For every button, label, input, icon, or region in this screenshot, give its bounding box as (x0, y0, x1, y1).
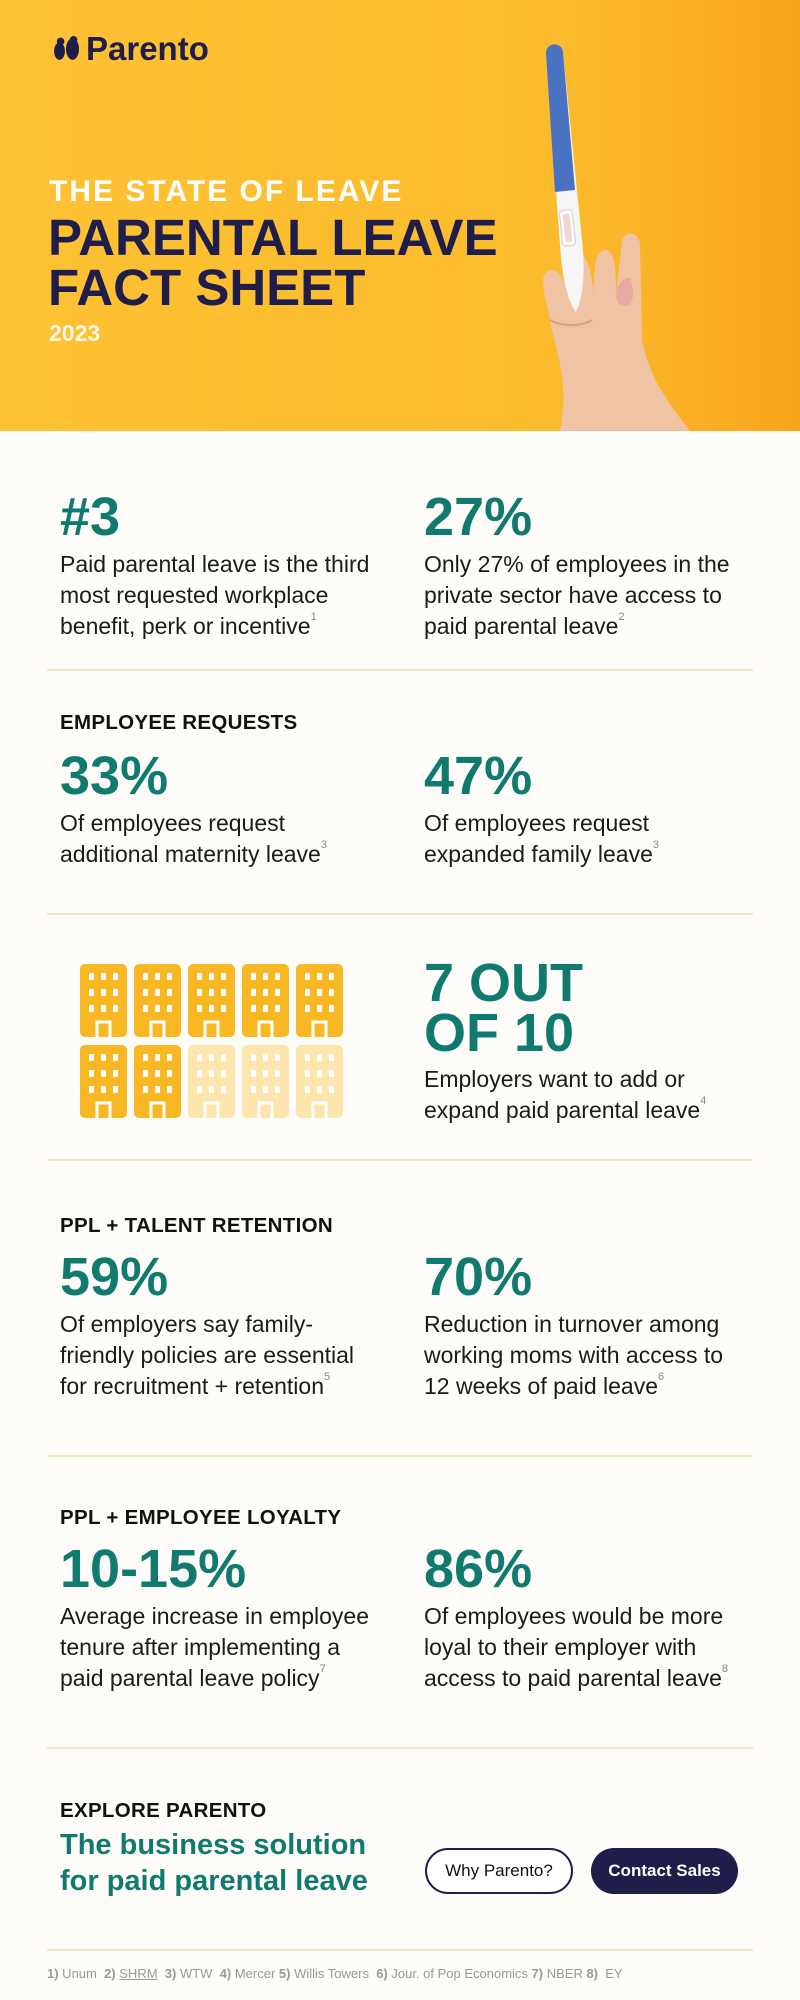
heading: PPL + talent retention: PPL + TALENT RETENTION (60, 1214, 333, 1237)
stat: 7 out of 10: 7 OUT (424, 953, 583, 1013)
stat: 86%: loyal to their employer with (424, 1634, 696, 1660)
title: PARENTAL LEAVE (48, 209, 498, 266)
stat: 59% (60, 1247, 354, 1399)
button: contact sales (591, 1848, 738, 1894)
button: contact sales: Contact Sales (608, 1861, 721, 1880)
title (48, 209, 498, 316)
stat: 59%: for recruitment + retention5 (60, 1371, 330, 1399)
stat: 10-15%: tenure after implementing a (60, 1634, 340, 1660)
stat: 47%: 47% (424, 746, 532, 806)
icon grid: 10 buildings, 7 highlighted (80, 964, 343, 1118)
stat: 33%: Of employees request (60, 810, 285, 836)
stat: 70%: working moms with access to (424, 1342, 723, 1368)
stat: 10-15%: 10-15% (60, 1539, 246, 1599)
stat: #3 (60, 487, 369, 639)
stat: 86%: access to paid parental leave8 (424, 1663, 728, 1691)
CTA: explore parento (60, 1799, 368, 1897)
stat: 33%: additional maternity leave3 (60, 839, 327, 867)
stat: 10-15%: paid parental leave policy7 (60, 1663, 326, 1691)
CTA: explore parento: for paid parental leave (60, 1865, 368, 1897)
stat: 7 out of 10: Employers want to add or (424, 1066, 685, 1092)
stat: 7 out of 10: OF 10 (424, 1003, 574, 1063)
title: FACT SHEET (48, 259, 365, 316)
stat: 33%: 33% (60, 746, 168, 806)
stat: 7 out of 10 (424, 953, 706, 1123)
stat: 59%: 59% (60, 1247, 168, 1307)
stat: 86% (424, 1539, 728, 1691)
stat: 47%: Of employees request (424, 810, 649, 836)
stat: 86%: Of employees would be more (424, 1603, 723, 1629)
stat: #3: Paid parental leave is the third (60, 551, 369, 577)
stat: 86%: 86% (424, 1539, 532, 1599)
stat: #3: most requested workplace (60, 582, 328, 608)
stat: 10-15% (60, 1539, 369, 1691)
CTA: explore parento: EXPLORE PARENTO (60, 1799, 266, 1822)
stat: 27%: paid parental leave2 (424, 611, 624, 639)
CTA: explore parento: The business solution (60, 1829, 366, 1861)
stat: 7 out of 10: expand paid parental leave4 (424, 1095, 706, 1123)
stat: 27%: Only 27% of employees in the (424, 551, 730, 577)
stat: #3: benefit, perk or incentive1 (60, 611, 317, 639)
sources footnote: 1) Unum 2) SHRM 3) WTW 4) Mercer 5) Willis Towers 6) Jour. of Pop Economics 7) NBER 8) EY (47, 1966, 623, 1981)
stat: 70% (424, 1247, 723, 1399)
stat: 59%: friendly policies are essential (60, 1342, 354, 1368)
button: why parento (425, 1848, 573, 1894)
button: why parento: Why Parento? (445, 1861, 553, 1880)
stat: 70%: Reduction in turnover among (424, 1311, 719, 1337)
year: 2023 (49, 320, 100, 346)
illustration: hand holding pregnancy test (543, 44, 690, 431)
logo: Parento (86, 30, 209, 67)
stat: 27% (424, 487, 730, 639)
stat: 70%: 70% (424, 1247, 532, 1307)
heading: PPL + employee loyalty: PPL + EMPLOYEE LOYALTY (60, 1506, 341, 1529)
header banner (0, 0, 800, 431)
kicker: the state of leave: THE STATE OF LEAVE (49, 175, 403, 208)
stat: 33% (60, 746, 327, 867)
stat: 27%: private sector have access to (424, 582, 722, 608)
stat: 47%: expanded family leave3 (424, 839, 659, 867)
stat: 27%: 27% (424, 487, 532, 547)
stat: 59%: Of employers say family- (60, 1311, 313, 1337)
stat: #3: #3 (60, 487, 120, 547)
stat: 47% (424, 746, 659, 867)
stat: 70%: 12 weeks of paid leave6 (424, 1371, 664, 1399)
stat: 10-15%: Average increase in employee (60, 1603, 369, 1629)
heading: employee requests: EMPLOYEE REQUESTS (60, 711, 297, 734)
